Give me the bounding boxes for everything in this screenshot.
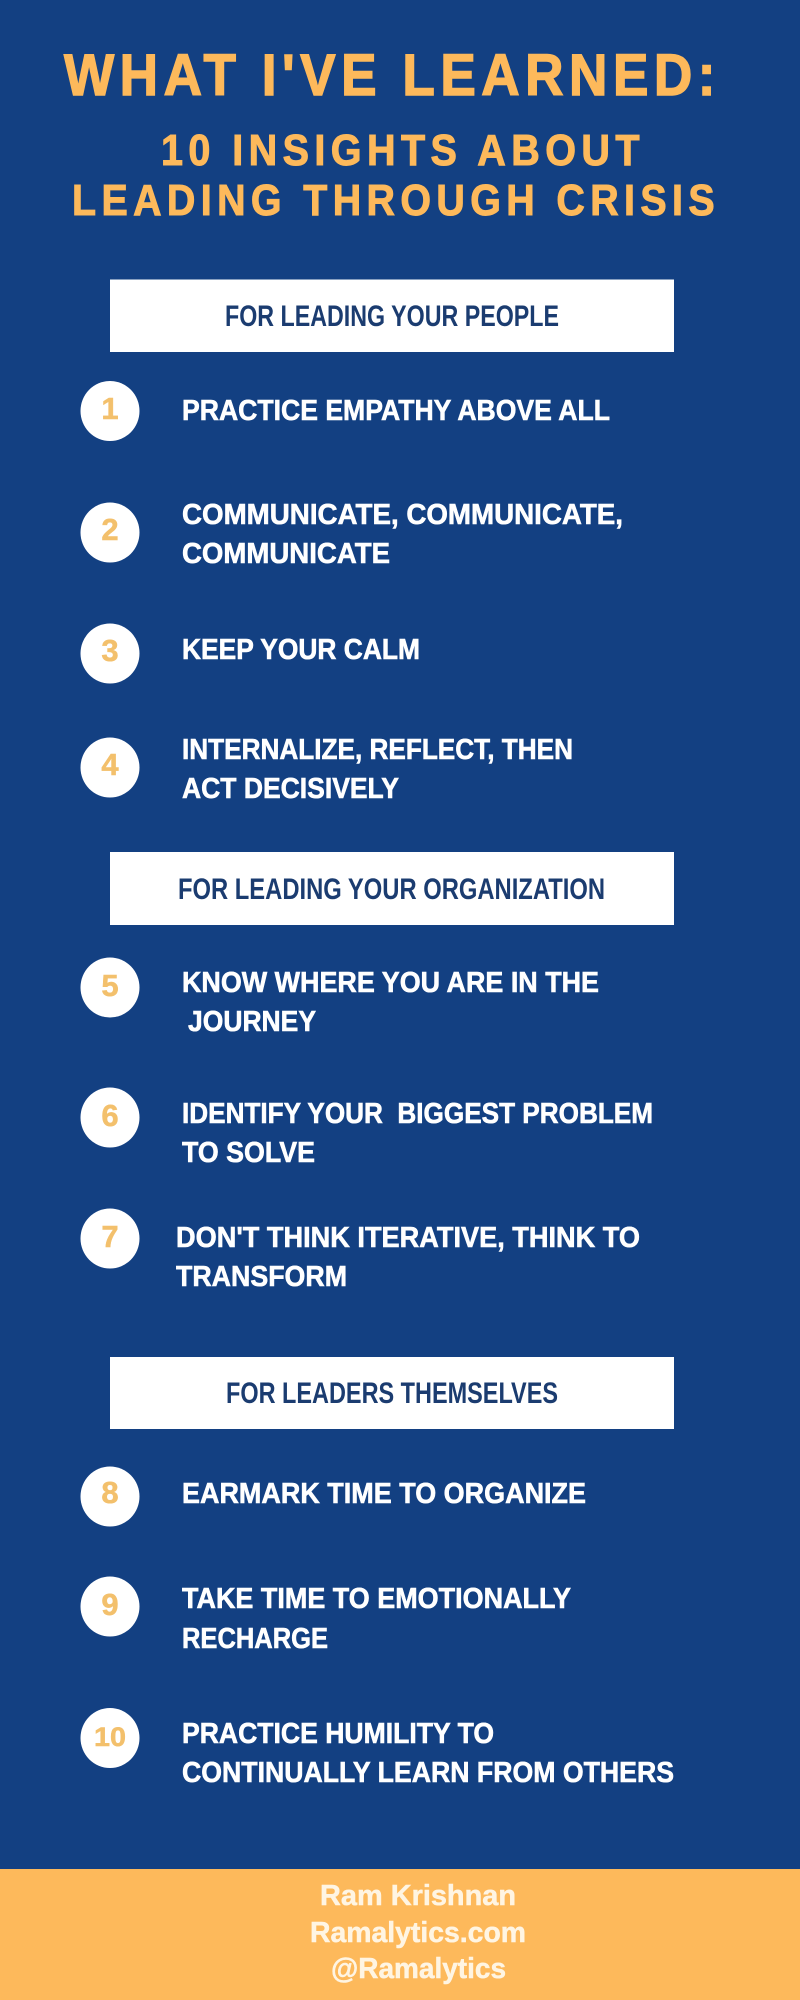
insight 10: CONTINUALLY LEARN FROM OTHERS [182, 1757, 674, 1789]
insight 5: JOURNEY [188, 1006, 316, 1038]
insight 2: 2 [101, 512, 119, 547]
section header: for leading your organization: FOR LEADING YOUR ORGANIZATION [178, 873, 605, 906]
website: Ramalytics.com [310, 1917, 526, 1949]
insight 7: 7 [101, 1219, 119, 1254]
insight 4 [80, 734, 573, 805]
insight 10: PRACTICE HUMILITY TO [182, 1718, 494, 1750]
insight 3 [80, 624, 420, 684]
author name: Ram Krishnan [320, 1880, 516, 1912]
insight 6: IDENTIFY YOUR BIGGEST PROBLEM [182, 1098, 653, 1130]
section header: for leading your people [110, 280, 674, 352]
insight 1 [80, 381, 610, 441]
section header: for leaders themselves [110, 1357, 674, 1429]
insight 9: 9 [101, 1587, 119, 1622]
subtitle line 2: LEADING THROUGH CRISIS [72, 176, 720, 225]
insight 4: INTERNALIZE, REFLECT, THEN [182, 734, 573, 766]
insight 2: COMMUNICATE [182, 538, 390, 570]
insight 6: TO SOLVE [182, 1137, 315, 1169]
insight 2: COMMUNICATE, COMMUNICATE, [182, 499, 623, 531]
insight 7 [80, 1208, 640, 1293]
insight 3: KEEP YOUR CALM [182, 634, 420, 666]
insight 5: 5 [101, 968, 119, 1003]
section header: for leaders themselves: FOR LEADERS THEMSELVES [226, 1377, 558, 1410]
insight 4: 4 [101, 747, 119, 782]
insight 9 [80, 1576, 571, 1655]
insight 1: PRACTICE EMPATHY ABOVE ALL [182, 395, 610, 427]
insight 8 [80, 1466, 586, 1526]
insight 6 [80, 1088, 653, 1169]
insight 5 [80, 958, 599, 1038]
insight 2 [80, 499, 623, 570]
insight 7: TRANSFORM [176, 1261, 347, 1293]
insight 8: EARMARK TIME TO ORGANIZE [182, 1478, 586, 1510]
footer band [0, 1869, 800, 2000]
insight 1: 1 [101, 391, 119, 426]
insight 3: 3 [101, 633, 119, 668]
social handle: @Ramalytics [331, 1953, 506, 1985]
insight 10 [80, 1708, 674, 1789]
insight 10: 10 [94, 1722, 126, 1752]
insight 8: 8 [101, 1475, 119, 1510]
main title: WHAT I'VE LEARNED: [64, 43, 721, 108]
insight 5: KNOW WHERE YOU ARE IN THE [182, 967, 599, 999]
section header: for leading your organization [110, 852, 674, 925]
insight 6: 6 [101, 1098, 119, 1133]
insight 9: TAKE TIME TO EMOTIONALLY [182, 1583, 571, 1615]
section header: for leading your people: FOR LEADING YOUR PEOPLE [225, 300, 559, 333]
insight 7: DON'T THINK ITERATIVE, THINK TO [176, 1222, 640, 1254]
subtitle line 1: 10 INSIGHTS ABOUT [161, 126, 645, 175]
insight 4: ACT DECISIVELY [182, 773, 399, 805]
title block [64, 43, 721, 225]
insight 9: RECHARGE [182, 1623, 328, 1655]
